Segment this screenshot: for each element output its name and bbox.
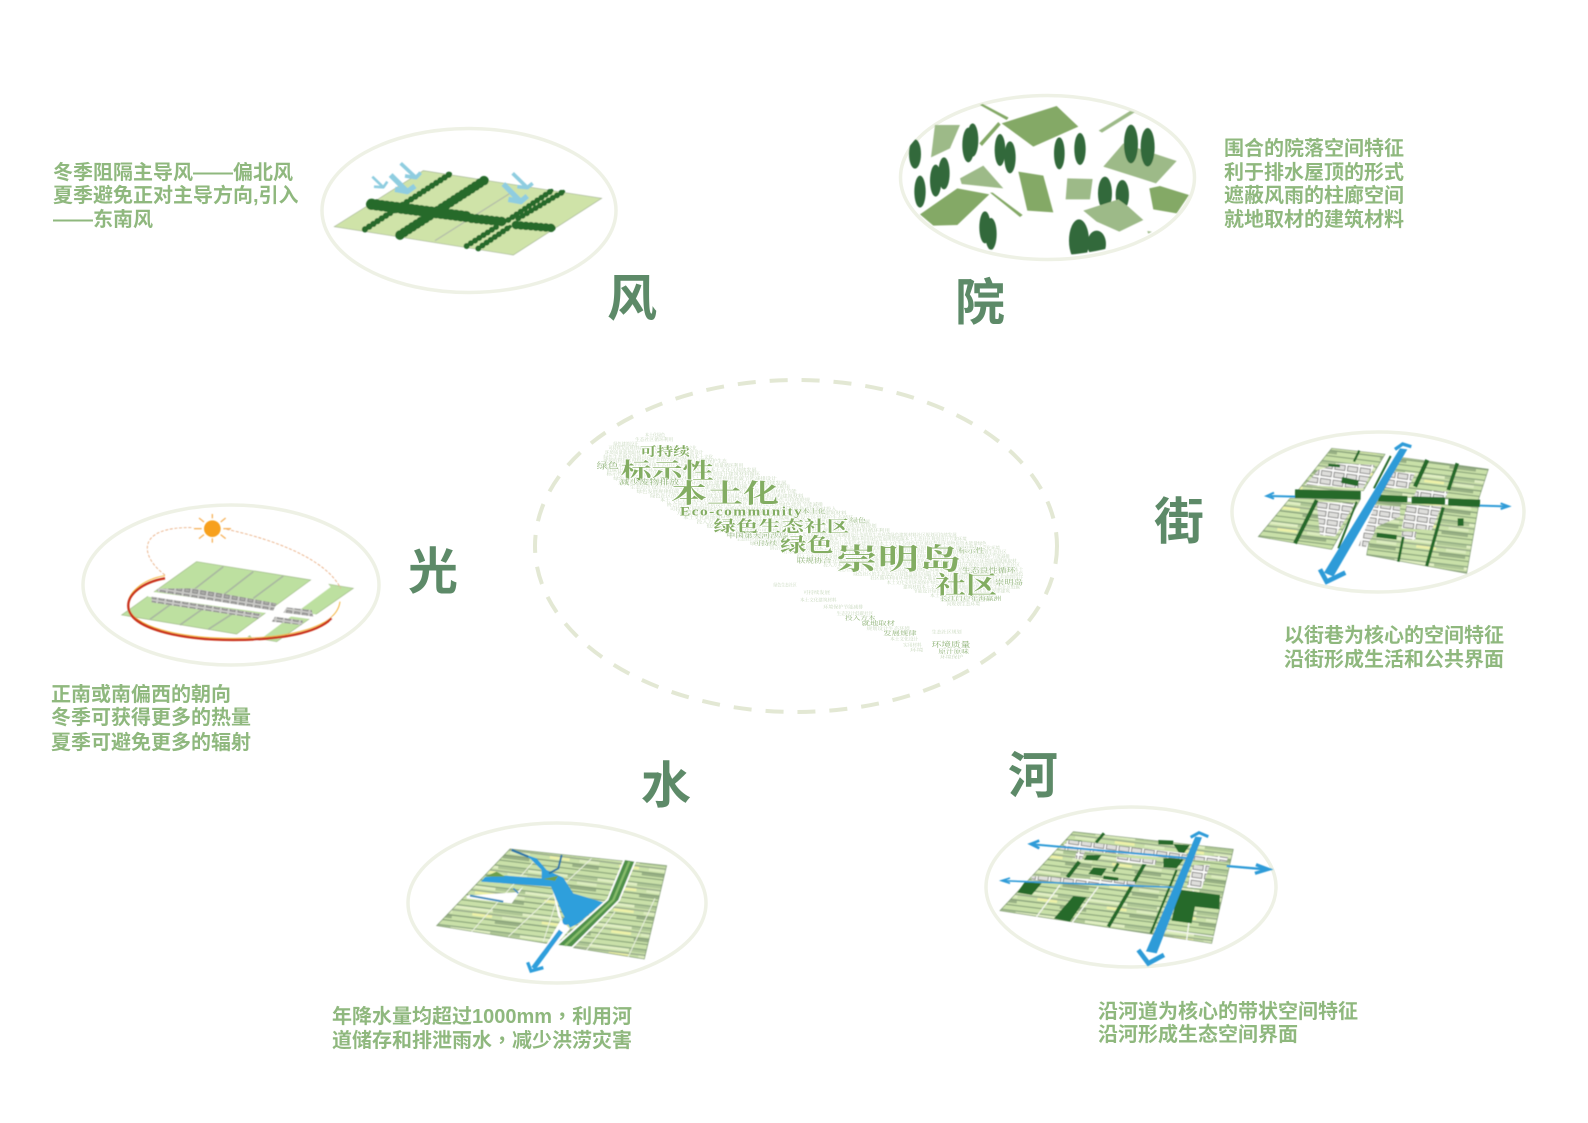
central dashed ellipse [535, 380, 1057, 712]
dark forest blocks [1017, 840, 1220, 923]
green corridors [1295, 451, 1480, 566]
water text: 年降水量均超过1000mm，利用河 [332, 1000, 632, 1029]
word: Eco-community: Eco-community [680, 506, 803, 519]
word cloud filler words: 绿色生态社区环境质量就地取材投入方本发展规律低碳节能减排设计 [613, 475, 777, 482]
word cloud filler words: 本土文化就地取材建筑材料规划 [930, 592, 997, 599]
word cloud filler words: 生态社区低碳节能设计 [940, 596, 991, 603]
panel: river [986, 748, 1358, 1046]
medium words: 绿色 [597, 460, 619, 471]
tree rows [365, 174, 563, 248]
word cloud filler words: 可持续发展规律绿色生态循环建筑材料本土文化 [608, 445, 697, 452]
winter sun ring [128, 576, 340, 638]
word cloud filler words: 低碳社区生态设计环境保护节能减排绿色建筑本土文化可持续发展 [607, 466, 757, 473]
street text: 以街巷为核心的空间特征 [1284, 623, 1504, 647]
word cloud filler words: 绿色社区的生态设计可持续发展中国最大的河口冲积岛屿建筑材料本土文化生态绿色 [853, 570, 1024, 577]
word cloud filler words: 协合河规划生态规划设计本土文化实用环境保护绿色建筑节能减排 [667, 501, 824, 508]
word: 绿色生态社区: 绿色生态社区 [713, 518, 849, 536]
street illustration [1258, 444, 1509, 582]
wind illustration [334, 163, 602, 255]
medium words: 环境质量 [932, 639, 971, 649]
word cloud filler words: 河规划生态环境 [947, 601, 981, 608]
word cloud filler words: 绿色生态循环发展可持续发展规律建筑材料本土文化 [603, 453, 714, 460]
word cloud filler words: 就地取材建筑材料规划生态社区低碳节能设计环境保护生态 [603, 458, 727, 465]
building blocks [1305, 463, 1448, 548]
word cloud filler words: 生态设计低碳社区 [837, 610, 874, 617]
wind text: ——东南风 [53, 207, 153, 231]
blue axis arrows [1267, 444, 1509, 582]
river text: 沿河道为核心的带状空间特征 [1098, 999, 1358, 1023]
river [481, 850, 603, 928]
word cloud filler words: 标示性本土化绿色可持续发展规律生态社区规划设计建筑材料循环利用 [717, 527, 890, 534]
building rows [152, 588, 313, 625]
white riverbank [540, 885, 570, 956]
medium words: 生态良性循环 [962, 566, 1017, 574]
word cloud [597, 432, 1024, 660]
tree crown beads [365, 174, 563, 248]
street text: 沿街形成生活和公共界面 [1284, 647, 1504, 671]
field blocks [1258, 448, 1488, 573]
field dividers [1037, 885, 1213, 940]
word cloud filler words: 可持续发展规律绿色生态循环建筑材料本土文化环境质量就地取材投入 [670, 505, 837, 512]
river text: 沿河形成生态空间界面 [1098, 1022, 1298, 1046]
medium words: 长江门户年海赢洲 [940, 594, 1001, 602]
word cloud filler words: 生态社区设计可持续发展生态岛建设规划绿色低碳本土文化循环利用 [630, 484, 790, 491]
river ellipse frame [986, 807, 1276, 967]
water ellipse frame [408, 823, 706, 983]
word cloud filler words: 环境保护 [940, 653, 964, 660]
panel: water [332, 758, 706, 1053]
word: 崇明岛: 崇明岛 [836, 543, 961, 575]
word cloud filler words: 低碳社区生态设计环境保护节能减排绿色建筑本土文化可持续发展规划 [707, 523, 877, 530]
light text: 正南或南偏西的朝向 [51, 682, 231, 706]
word cloud filler words: 标示性本土化绿色可持续发展规律生态社区规划设计建筑材料循环 [607, 471, 761, 478]
river illustration [1000, 832, 1268, 963]
ground plate [334, 171, 602, 255]
word cloud filler words: 方本生态社区低碳节能设计绿色生态循环发展可持续发展规律建筑材料 [677, 510, 847, 517]
medium words: 联规协合 [797, 556, 832, 564]
medium words: 发展规律 [883, 630, 917, 637]
courtyard heading: 院 [955, 275, 1005, 331]
courtyard text: 利于排水屋顶的形式 [1224, 161, 1404, 184]
light illustration [122, 514, 353, 642]
trees in front [1124, 125, 1155, 167]
medium words: 原汁原味 [938, 647, 969, 655]
word cloud filler words [603, 432, 1024, 660]
green corridors [1067, 833, 1177, 933]
water text: 道储存和排泄雨水，减少洪涝灾害 [332, 1024, 632, 1053]
farmland [1000, 832, 1233, 943]
green strip [558, 860, 634, 947]
panel: street [1154, 432, 1524, 671]
word cloud filler words: 绿色生态社区 [773, 582, 797, 589]
panel: light [51, 505, 458, 754]
infographic canvas [52, 94, 1526, 1050]
medium words: 减少废物排放 [619, 477, 679, 486]
word cloud filler words: 本土文化就地取材建筑材料规划生态社区低碳节能设计环境保护生态循环 [683, 514, 854, 521]
medium words: 可持续 [753, 540, 777, 547]
river islands [543, 876, 558, 881]
sun path [147, 528, 341, 588]
wind text: 夏季避免正对主导方向,引入 [53, 183, 299, 207]
medium words: 崇明岛 [995, 578, 1023, 586]
village rows [1032, 840, 1228, 888]
word cloud filler words: 生态社区设计可持续发展生态岛建设规划绿色低碳本土文化循环利用绿色发展规律低碳本土生态社区规划设计方案环境 [737, 536, 967, 543]
medium words: 就地取材 [862, 620, 896, 627]
wind heading: 风 [607, 271, 657, 327]
medium words: 标示性 [958, 546, 985, 554]
medium words: 绿色 [850, 516, 866, 524]
white road [148, 594, 337, 620]
sun [194, 514, 231, 543]
word cloud filler words: 可持续发展 [803, 589, 831, 596]
word cloud filler words: 标示性本土化绿色可持续发展规律生态社区规划设计建筑材料循环利用绿色生态社区环境质量就地取材 [810, 557, 1017, 564]
word cloud filler words: 投入方本可持续发展规律生态社区绿色建筑设计环境质量循环利用低碳 [697, 518, 871, 525]
word cloud filler words: 本土化绿色 [645, 432, 666, 439]
ground plots [122, 562, 311, 634]
light text: 冬季可获得更多的热量 [51, 706, 251, 729]
medium words: 投入方本 [845, 614, 876, 622]
word cloud filler words: 实用材料 [903, 642, 922, 649]
trees behind roofs [909, 123, 1129, 262]
street heading: 街 [1154, 494, 1204, 550]
water illustration [437, 849, 667, 971]
word cloud filler words: 绿色发展规律低碳本土生态社区规划设计方案环境保护建筑材料节能 [637, 488, 797, 495]
word cloud filler words: 规划设计生态环境 [867, 625, 911, 632]
word cloud filler words: 环境质量生态循环崇明岛生态环境绿色建筑材料社区规划可持续发展 [618, 479, 788, 486]
word cloud filler words: 本土文化设计 [890, 636, 919, 643]
word cloud filler words: 环境保护节能减排 [823, 603, 864, 610]
word cloud filler words: 建筑材料本土文化环境质量就地取材投入方本生态社区低碳 [903, 583, 1021, 590]
lighter roofs [931, 111, 1177, 234]
word cloud filler words: 绿色建筑设计 [613, 440, 639, 447]
courtyard illustration [909, 104, 1189, 262]
wind arrows [372, 163, 533, 202]
farmland [437, 849, 667, 959]
medium words: 中国第大河沙岛 [727, 531, 788, 539]
word cloud filler words: 节能设计绿色生态循环发展可持续发展规律建筑 [913, 588, 1011, 595]
medium words [597, 460, 1023, 655]
panel: wind [53, 128, 657, 327]
word cloud filler words: 生态社区设计可持续发展生态岛建设规划绿色低碳本土文化循环利用绿色发展规律低碳本土 [837, 566, 1024, 573]
word cloud filler words: 社区循环利用环境物质资本能量绿色可持续联规协合河规划生态规划设计 [870, 575, 1024, 582]
word cloud filler words: 投入方本发展规律低碳节能减排设计崇明岛生态环境绿色建筑材料社区规划可持续发展生态社区 [823, 562, 1021, 569]
word cloud filler words: 本土文化生态绿色社区循环利用环境物质资本能量绿色可持续联规 [660, 497, 811, 504]
word cloud filler words: 绿色社区的生态设计可持续发展中国最大的河口冲积岛屿建筑材料 [650, 492, 804, 499]
word cloud filler words: 方本生态社区低碳节能设计绿色生态循环发展可持续发展规律建筑材料本土文化就地取材建筑材料规划生态社区 [783, 549, 1007, 556]
word: 标示性: 标示性 [621, 459, 714, 484]
word cloud filler words: 绿色生态社区环境质量就地取材投入方本发展规律低碳节能减排设计崇明岛生态环境绿色建筑材料社区规划可持续发展 [727, 531, 957, 538]
word cloud filler words: 投入方本可持续发展规律生态社区绿色建筑设计环境质量循环利用 [603, 462, 743, 469]
light ellipse frame [83, 505, 379, 665]
light heading: 光 [408, 544, 458, 600]
word: 本土化: 本土化 [671, 480, 779, 508]
courtyard text: 遮蔽风雨的柱廊空间 [1224, 183, 1404, 207]
word cloud filler words: 绿色社区的生态设计可持续发展中国最大的河口冲积岛屿建筑材料本土文化生态绿色社区循环利用环境物质资本能量绿色 [750, 540, 987, 547]
word cloud filler words: 环境质量就地取材投入方本生态社区低碳节能设计 [605, 449, 704, 456]
word cloud filler words: 生态社区循环利用 [635, 436, 673, 443]
courtyard text: 围合的院落空间特征 [1224, 136, 1404, 160]
word cloud filler words: 投入方本可持续发展规律生态社区绿色建筑设计环境质量循环利用低碳低碳社区生态设计环境保护节能减排 [797, 553, 1011, 560]
word cloud filler words: 环境 [910, 647, 924, 654]
river heading: 河 [1008, 748, 1058, 804]
courtyard ellipse frame [900, 96, 1194, 260]
word: 绿色: 绿色 [780, 535, 833, 557]
word cloud filler words: 本土文化实用环境保护绿色建筑节能减排可持续发展规律绿色生态循环 [887, 579, 1024, 586]
word cloud filler words: 协合河规划生态规划设计本土文化实用环境保护绿色建筑节能减排可持续发展规律绿色生态循环建筑材料本土文化环境 [770, 544, 1001, 551]
street ellipse frame [1232, 432, 1524, 592]
courtyard text: 就地取材的建筑材料 [1224, 207, 1404, 231]
light text: 夏季可避免更多的辐射 [51, 731, 251, 754]
outflow arrow [533, 931, 561, 968]
water heading: 水 [641, 758, 691, 814]
word cloud filler words: 生态社区规划 [932, 628, 962, 635]
wind text: 冬季阻隔主导风——偏北风 [53, 161, 293, 184]
field dividers [468, 858, 655, 957]
wind ellipse frame [322, 128, 616, 292]
darker roofs [920, 104, 1189, 226]
word: 可持续: 可持续 [640, 444, 691, 459]
medium words: 本土化 [802, 508, 826, 515]
word: 社区: 社区 [935, 572, 997, 599]
word cloud filler words: 本土文化建筑材料 [800, 597, 837, 604]
blue axis arrows [1002, 833, 1268, 963]
panel: courtyard [900, 96, 1404, 331]
